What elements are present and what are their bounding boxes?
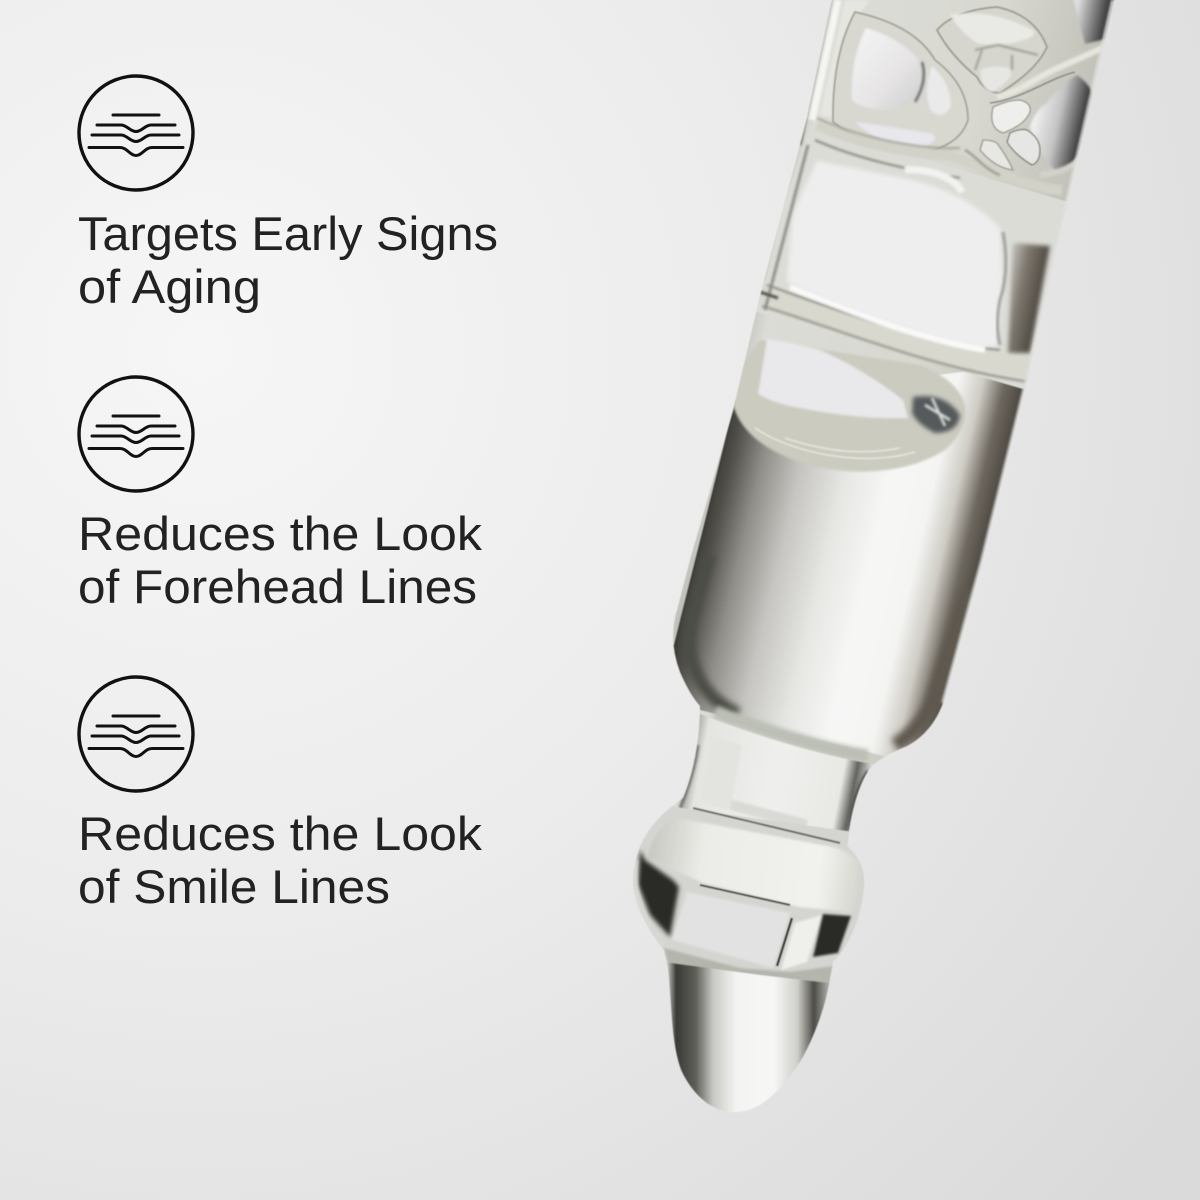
right facet — [781, 915, 822, 970]
meniscus band — [760, 285, 1030, 382]
text: reduces the look of forehead lines: Reduces the Look — [78, 507, 483, 560]
dark line on wall — [990, 72, 1075, 103]
lens — [733, 340, 966, 472]
air pocket — [787, 161, 1003, 347]
lens ripples — [755, 428, 915, 458]
big bubble wall — [833, 12, 968, 152]
bulb base — [646, 807, 864, 966]
text: targets early signs of aging — [78, 207, 498, 313]
text: targets early signs of aging: Targets Early Signs — [78, 207, 498, 260]
panel top seam — [700, 885, 790, 905]
benefit 3 — [78, 677, 483, 913]
panel right seam — [777, 918, 792, 966]
text: targets early signs of aging: of Aging — [78, 260, 261, 313]
dark outline of wedge — [634, 860, 648, 918]
right tube edge — [943, 0, 1113, 703]
neck highlights — [678, 744, 868, 830]
rim under bubbles — [815, 118, 1085, 192]
lens bubble — [937, 7, 1047, 93]
dark left wedge — [638, 850, 679, 937]
cluster bubble a — [992, 100, 1030, 133]
white pane 2 — [927, 66, 951, 115]
cluster bubble c — [980, 140, 1013, 170]
glass dropper — [620, 0, 1140, 1130]
white pane 3 — [855, 122, 935, 148]
left glass strip — [822, 1, 868, 116]
bulb neck seam — [693, 808, 840, 843]
lower meniscus lens — [733, 339, 966, 472]
lower rim — [664, 948, 834, 985]
blue-grey pane edge — [915, 62, 924, 102]
bulb — [636, 806, 864, 984]
cluster bubble b — [1007, 129, 1040, 165]
icon: forehead lines 2 — [79, 377, 193, 491]
neck — [681, 714, 874, 832]
text: reduces the look of forehead lines: of Forehead Lines — [78, 560, 477, 613]
air gap upper glass rim — [756, 171, 1066, 390]
white blob — [758, 339, 908, 418]
dark refraction — [912, 396, 960, 433]
text: reduces the look of smile lines: Reduces the Look — [78, 807, 483, 860]
white panel — [672, 892, 790, 968]
bulb upper band — [648, 817, 859, 912]
light bubble wall diagonal — [997, 45, 1108, 97]
white pane 1 — [852, 28, 921, 110]
text: reduces the look of forehead lines — [78, 507, 483, 613]
liquid column — [673, 372, 1024, 756]
tip — [667, 962, 829, 1112]
dark top corner — [1073, 0, 1114, 45]
lens inner pane — [980, 66, 1011, 92]
icon: forehead lines 1 — [79, 76, 193, 190]
text: reduces the look of smile lines: of Smile Lines — [78, 860, 390, 913]
pocket right shadow — [998, 232, 1006, 345]
shoulder glass band — [689, 555, 968, 756]
dark right strip — [1008, 243, 1050, 353]
benefit 1 — [78, 76, 498, 313]
glass base — [634, 0, 1104, 908]
text: reduces the look of smile lines — [78, 807, 483, 913]
dark right wedge — [813, 914, 851, 957]
lens grey web — [975, 45, 1038, 70]
lens top pane — [950, 13, 1034, 45]
icon: smile lines — [79, 677, 193, 791]
bubbles — [815, 0, 1120, 192]
benefit 2 — [78, 377, 483, 613]
dark right void — [1030, 75, 1094, 172]
left edge refraction — [760, 0, 838, 310]
